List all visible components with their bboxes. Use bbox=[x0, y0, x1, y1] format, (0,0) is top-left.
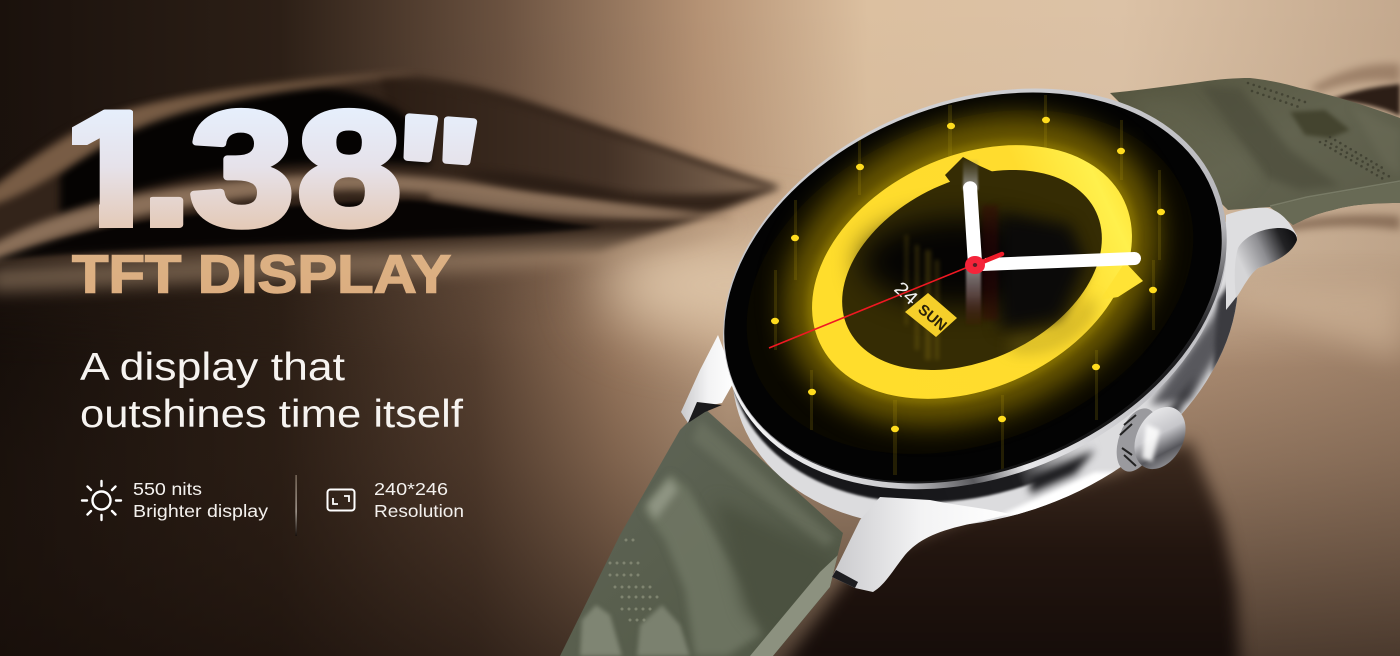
text: 240*246: 240*246 bbox=[374, 479, 448, 499]
lower strap bbox=[560, 407, 843, 656]
hour hand bbox=[982, 252, 1141, 271]
second hand bbox=[769, 265, 973, 348]
feature: brightness bbox=[82, 479, 268, 521]
dark centre bbox=[862, 218, 1062, 306]
hour dots bbox=[771, 117, 1165, 432]
date tag: SUN: SUN bbox=[914, 301, 950, 335]
lugs bbox=[681, 208, 1297, 592]
upper strap bbox=[1110, 78, 1400, 225]
glow streaks bbox=[774, 95, 1161, 475]
text: 550 nits: Brighter display bbox=[133, 501, 268, 521]
second hand tail and hub bbox=[965, 254, 1002, 274]
yellow glow bbox=[781, 103, 1163, 437]
ring interior with spike bbox=[842, 157, 1102, 370]
dark shadow beneath the watch bbox=[780, 440, 1240, 656]
watch face bbox=[724, 92, 1222, 482]
text: 240*246: Resolution bbox=[374, 501, 464, 521]
date tag: SUN bbox=[905, 293, 957, 337]
icon: sun bbox=[82, 481, 121, 520]
text: 550 nits: 550 nits bbox=[133, 479, 202, 499]
tagline: outshines time itself bbox=[80, 393, 463, 436]
yellow ring bbox=[812, 145, 1132, 399]
subheading: TFT DISPLAY: TFT DISPLAY bbox=[72, 244, 451, 304]
polished rim under the glass bbox=[663, 21, 1287, 561]
date: 24: 24 bbox=[890, 278, 922, 310]
divider bbox=[296, 475, 297, 536]
tagline: A display that bbox=[80, 346, 345, 389]
watch bbox=[560, 17, 1400, 656]
feature: resolution bbox=[328, 479, 464, 521]
case reflections bbox=[733, 282, 1238, 518]
ghost reflections bbox=[963, 160, 978, 190]
headline: 1.38": 1.38" bbox=[60, 78, 489, 269]
icon: screen bbox=[328, 490, 354, 510]
bezel bbox=[664, 17, 1286, 555]
crown bbox=[1109, 398, 1196, 478]
minute hand bbox=[963, 181, 982, 265]
case body bbox=[671, 51, 1299, 599]
